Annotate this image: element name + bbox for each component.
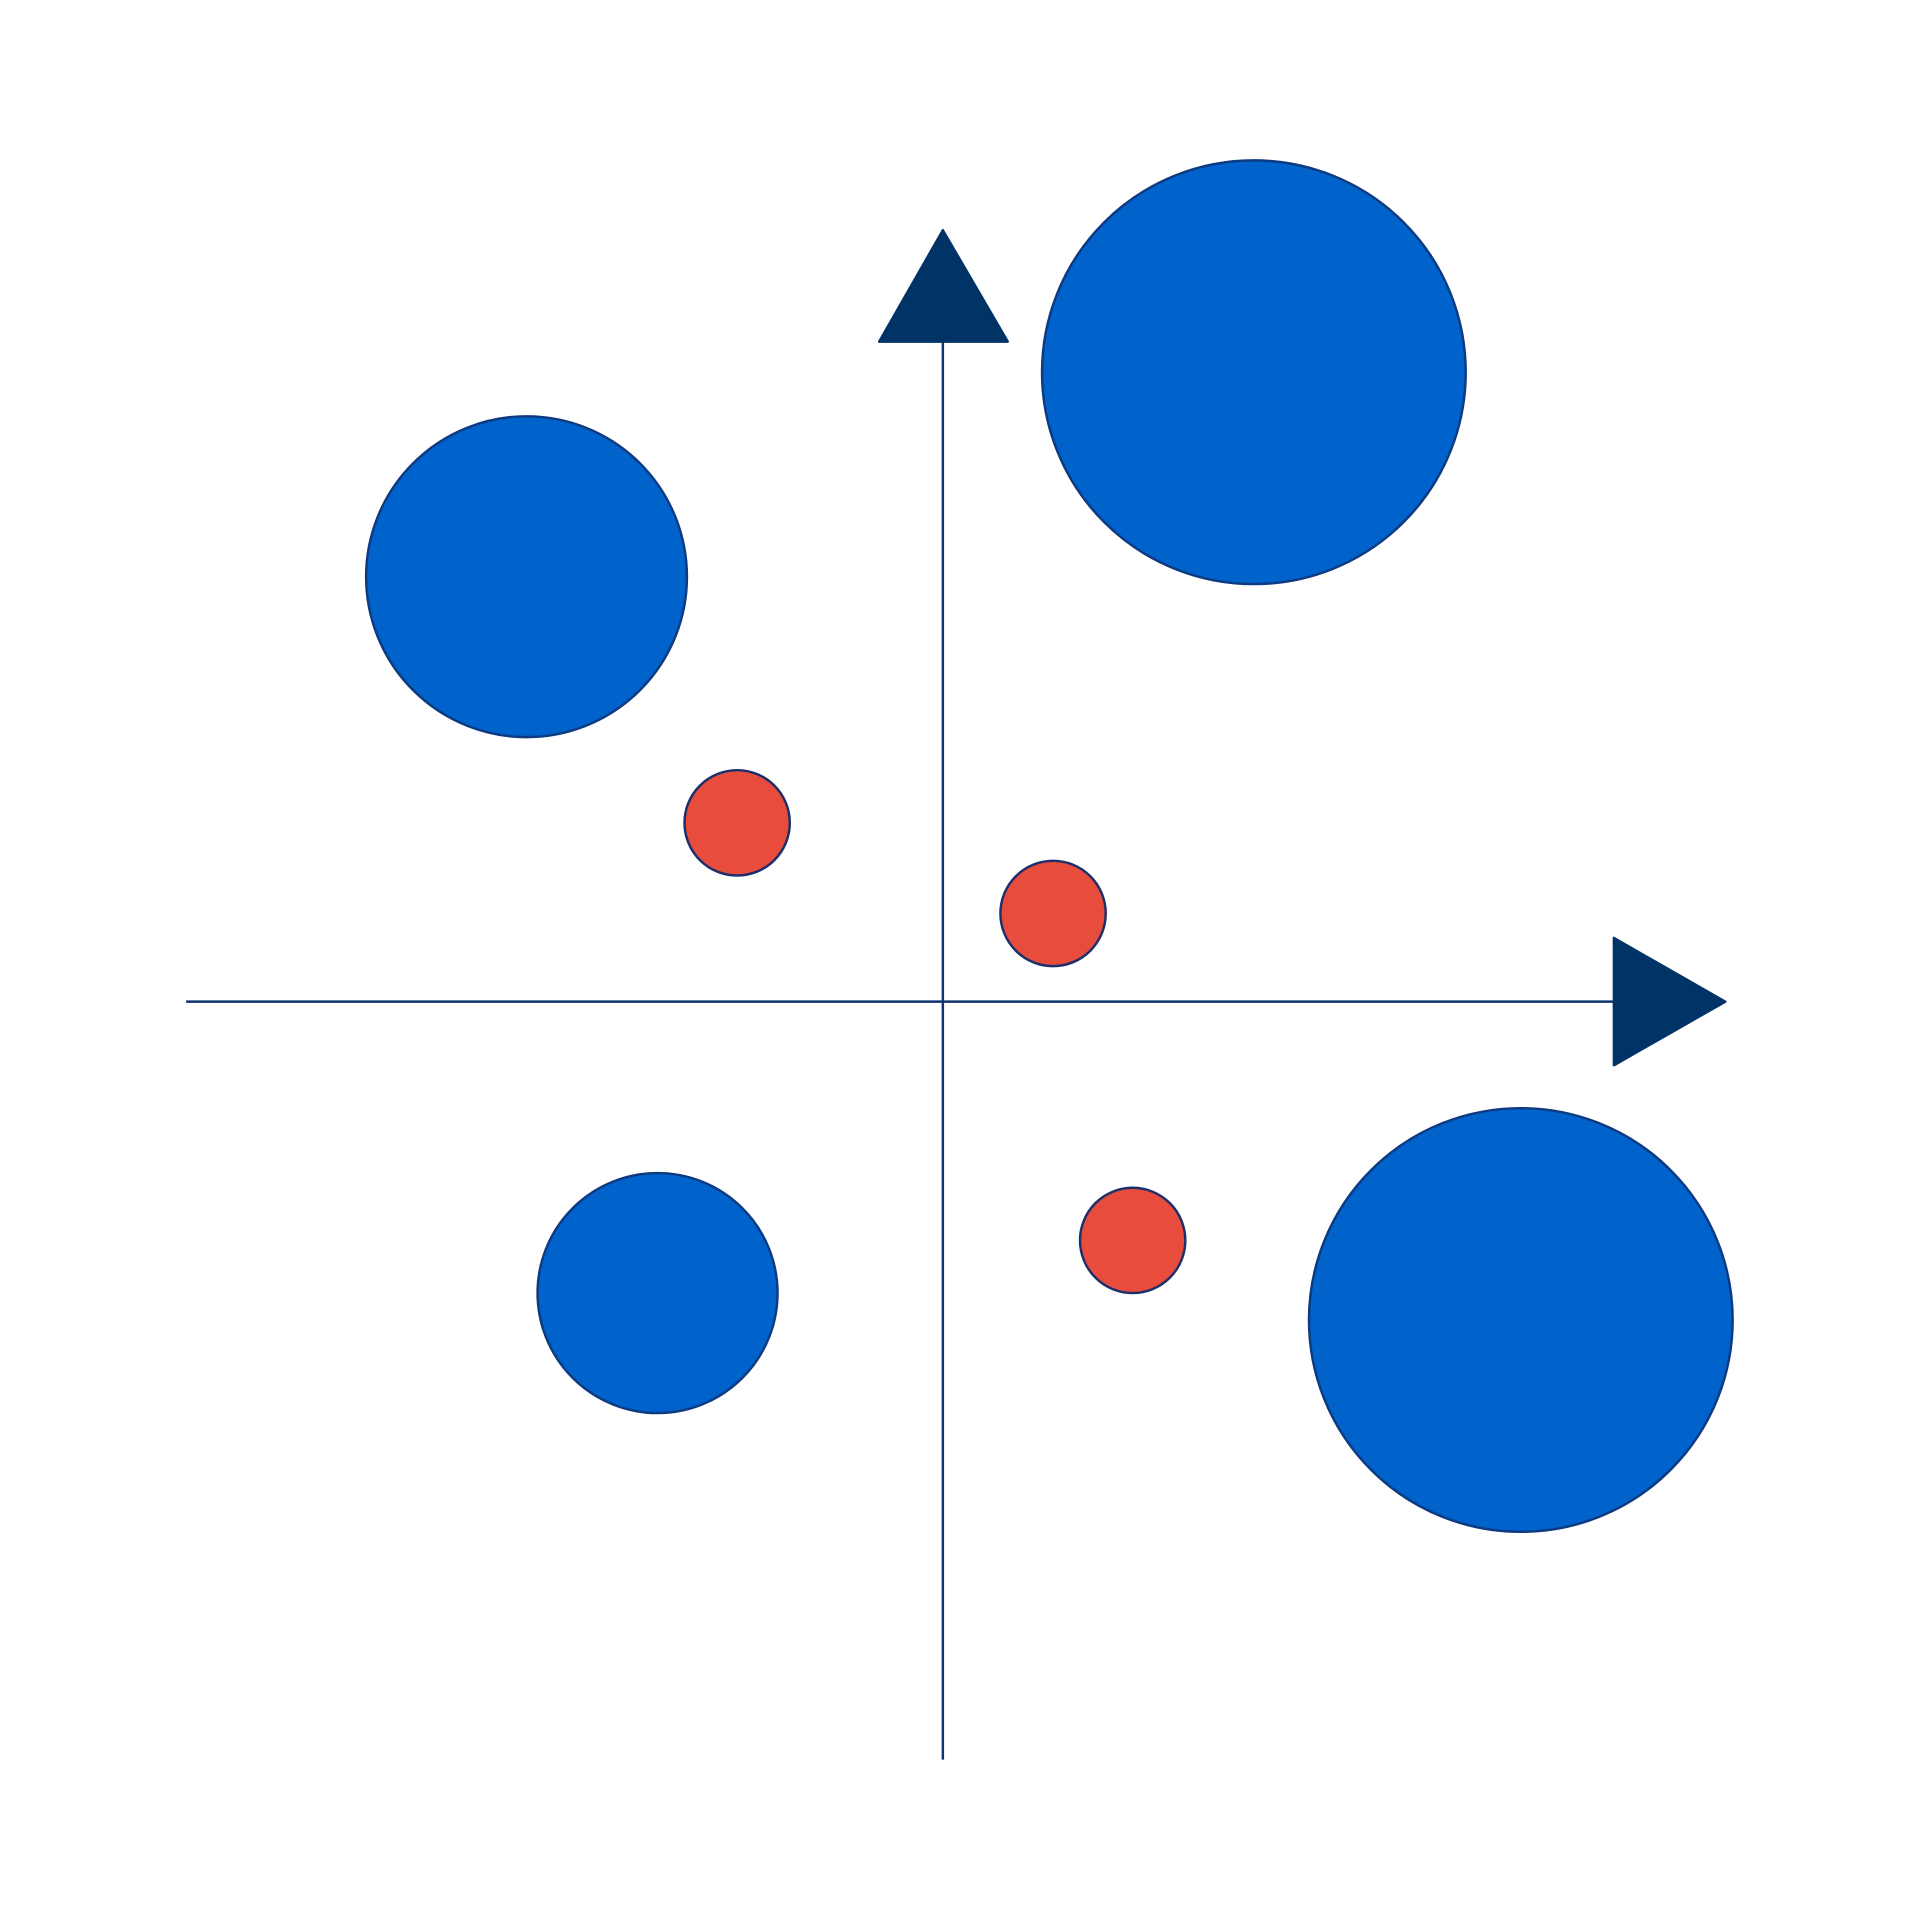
bubble: large top right xyxy=(1042,160,1466,584)
bubble: top left xyxy=(366,416,687,737)
horizontal axis xyxy=(186,938,1725,1065)
bubble: small red upper left xyxy=(684,770,790,876)
vertical axis xyxy=(879,230,1008,1760)
bubble: bottom left xyxy=(538,1173,778,1413)
bubble: small red near origin xyxy=(1000,861,1106,966)
bubble: large bottom right xyxy=(1309,1108,1733,1532)
bubble: small red lower right xyxy=(1080,1188,1185,1293)
